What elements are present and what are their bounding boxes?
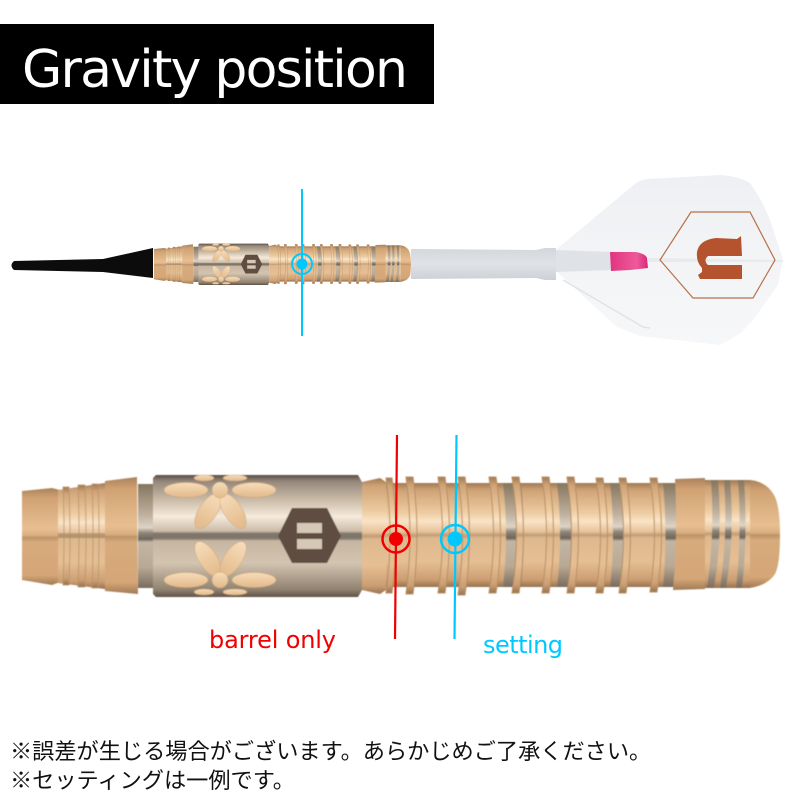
dart shaft <box>411 248 556 280</box>
label: barrel only: barrel only <box>209 626 336 654</box>
title: Gravity position <box>22 40 408 100</box>
marker: setting <box>441 435 469 639</box>
note text: ※誤差が生じる場合がございます。あらかじめご了承ください。 <box>10 738 651 764</box>
title <box>0 24 434 104</box>
note text: ※セッティングは一例です。 <box>10 768 295 793</box>
dart flight <box>556 175 783 345</box>
note text <box>10 738 651 793</box>
icon: dart tip <box>12 248 153 278</box>
marker: setting position on full dart <box>292 189 312 336</box>
full dart illustration <box>12 175 783 345</box>
label: setting: setting <box>483 631 563 659</box>
enlarged barrel <box>22 475 780 597</box>
marker: barrel only <box>382 435 410 639</box>
small barrel <box>154 244 411 285</box>
